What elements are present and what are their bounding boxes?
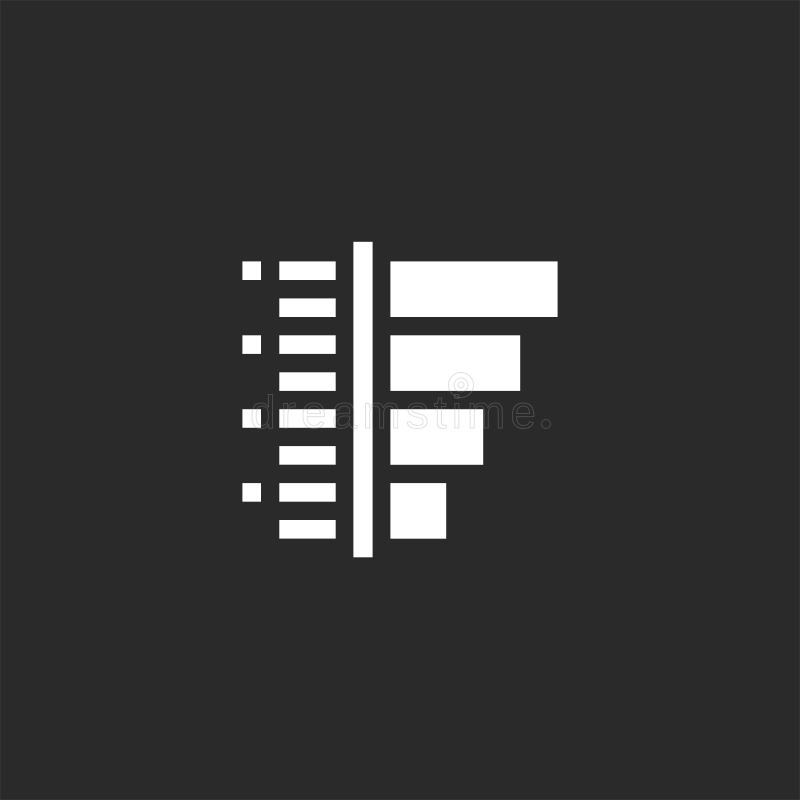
- watermark wordmark: dreamstime: [250, 386, 536, 438]
- watermark registered mark: [542, 420, 550, 428]
- icon: bar chart with legend: [242, 242, 558, 557]
- vertical axis: [353, 242, 373, 557]
- horizontal bars: [390, 261, 558, 539]
- watermark spiral logo: [448, 372, 474, 398]
- watermark: [250, 372, 550, 438]
- legend text lines: [279, 261, 336, 539]
- legend markers: [242, 261, 261, 502]
